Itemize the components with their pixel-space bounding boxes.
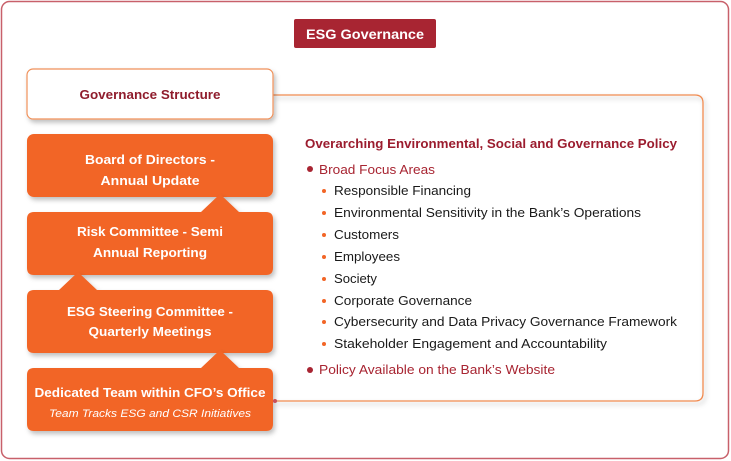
heading: governance structure: [27, 69, 273, 119]
policy text block: Customers: [334, 228, 399, 242]
policy text block: Overarching Environmental, Social and Governance Policy: [305, 136, 678, 151]
heading: governance structure: Governance Structure: [80, 88, 221, 102]
policy text block: Stakeholder Engagement and Accountability: [334, 337, 608, 351]
policy text block: Policy Available on the Bank’s Website: [319, 363, 555, 377]
box: dedicated team: Dedicated Team within CFO’s Office: [34, 386, 266, 400]
policy text block: [305, 136, 678, 377]
box: dedicated team: Team Tracks ESG and CSR Initiatives: [49, 408, 252, 420]
box: dedicated team: [27, 350, 273, 431]
title: [294, 19, 436, 48]
box: esg steering committee: Quarterly Meetings: [88, 325, 212, 339]
policy text block: Broad Focus Areas: [319, 163, 435, 177]
title: ESG Governance: [306, 26, 424, 42]
policy text block: Environmental Sensitivity in the Bank’s Operations: [334, 206, 641, 220]
box: esg steering committee: ESG Steering Committee -: [67, 305, 233, 319]
box: board of directors: [27, 134, 273, 197]
box: board of directors: Board of Directors -: [85, 153, 215, 167]
box: risk committee: Risk Committee - Semi: [77, 225, 223, 239]
policy text block: Responsible Financing: [334, 184, 471, 198]
policy text block: Cybersecurity and Data Privacy Governance Framework: [334, 315, 678, 329]
box: risk committee: Annual Reporting: [93, 246, 207, 260]
box: board of directors: Annual Update: [100, 174, 200, 188]
policy text block: Employees: [334, 250, 400, 264]
connector dot: [273, 399, 277, 403]
box: esg steering committee: [27, 272, 273, 353]
policy text block: Corporate Governance: [334, 294, 472, 308]
policy text block: Society: [334, 272, 378, 286]
box: risk committee: [27, 194, 273, 275]
policy panel border: [273, 95, 703, 401]
